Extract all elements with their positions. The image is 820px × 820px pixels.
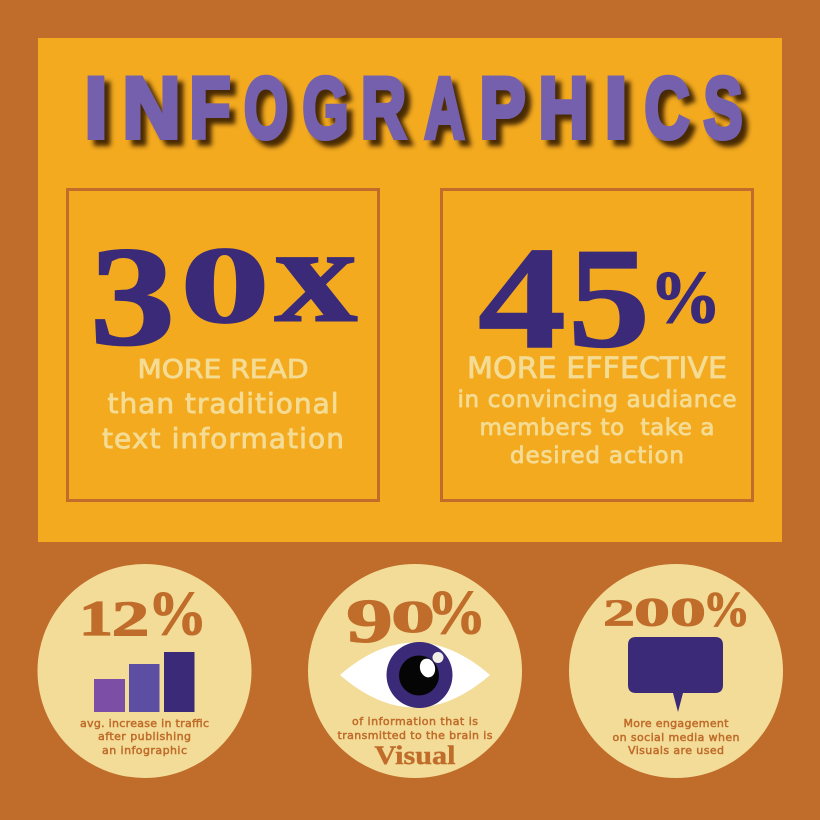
caption: More engagement	[624, 717, 729, 730]
stat: 45%: 5	[568, 219, 650, 377]
title: G	[302, 60, 348, 156]
title: O	[244, 60, 288, 156]
caption	[612, 717, 740, 757]
caption: transmitted to the brain is	[338, 729, 493, 742]
panel: top orange panel	[38, 38, 782, 542]
title	[84, 60, 742, 156]
caption	[338, 715, 493, 742]
text: than traditional: than traditional	[108, 387, 338, 420]
text: more effective: MORE EFFECTIVE	[467, 351, 727, 385]
title: P	[480, 60, 526, 156]
caption: an infographic	[102, 744, 187, 757]
text: members to take a: members to take a	[480, 415, 714, 441]
panel: left stat box	[68, 190, 378, 500]
stat: 200%	[603, 580, 750, 636]
caption: on social media when	[612, 731, 740, 744]
title: C	[644, 60, 690, 156]
title: F	[190, 60, 230, 156]
stat: 90%: %	[427, 579, 486, 647]
stat: 12%: 2	[112, 590, 150, 646]
stat: 90%: 9	[346, 588, 393, 656]
stat: 90%: 0	[391, 591, 435, 642]
caption	[80, 717, 209, 757]
stat: 45%: %	[650, 257, 721, 339]
bar chart	[94, 652, 194, 712]
panel: 200% circle	[569, 564, 783, 778]
stat: 12%: %	[148, 580, 207, 648]
stat: 30x	[90, 198, 358, 375]
caption: Visuals are used	[628, 744, 724, 757]
caption: of information that is	[352, 715, 478, 728]
panel: 90% circle	[308, 564, 522, 778]
stat: 200%: 2	[603, 592, 635, 634]
stat: 200%: 0	[634, 590, 670, 634]
panel: 12% circle	[38, 564, 252, 778]
stat: 12%	[79, 580, 207, 648]
title: N	[122, 60, 180, 156]
stat: 12%: 1	[79, 590, 113, 646]
stat: 30x: x	[274, 198, 358, 351]
text: desired action: desired action	[510, 443, 684, 469]
caption: after publishing	[98, 730, 191, 743]
title: I	[604, 60, 628, 156]
stat: 200%: 0	[670, 590, 706, 634]
title: S	[704, 60, 742, 156]
stat: 30x: 0	[180, 224, 270, 346]
icon: eye	[340, 642, 490, 708]
text: text information: text information	[102, 422, 344, 455]
stat: 45%	[478, 217, 721, 379]
panel: right stat box	[442, 190, 752, 500]
caption: avg. increase in traffic	[80, 717, 209, 730]
text: Visual: Visual	[374, 741, 456, 770]
title: I	[84, 60, 108, 156]
text: in convincing audiance: in convincing audiance	[458, 387, 736, 413]
text: more read: MORE READ	[138, 355, 308, 385]
icon: speech bubble	[628, 637, 723, 712]
stat: 30x: 3	[90, 217, 175, 375]
stat: 45%: 4	[478, 217, 566, 379]
title: H	[538, 60, 588, 156]
title: A	[424, 60, 464, 156]
stat: 90%	[346, 579, 486, 656]
title: R	[361, 60, 406, 156]
stat: 200%: %	[703, 580, 750, 636]
